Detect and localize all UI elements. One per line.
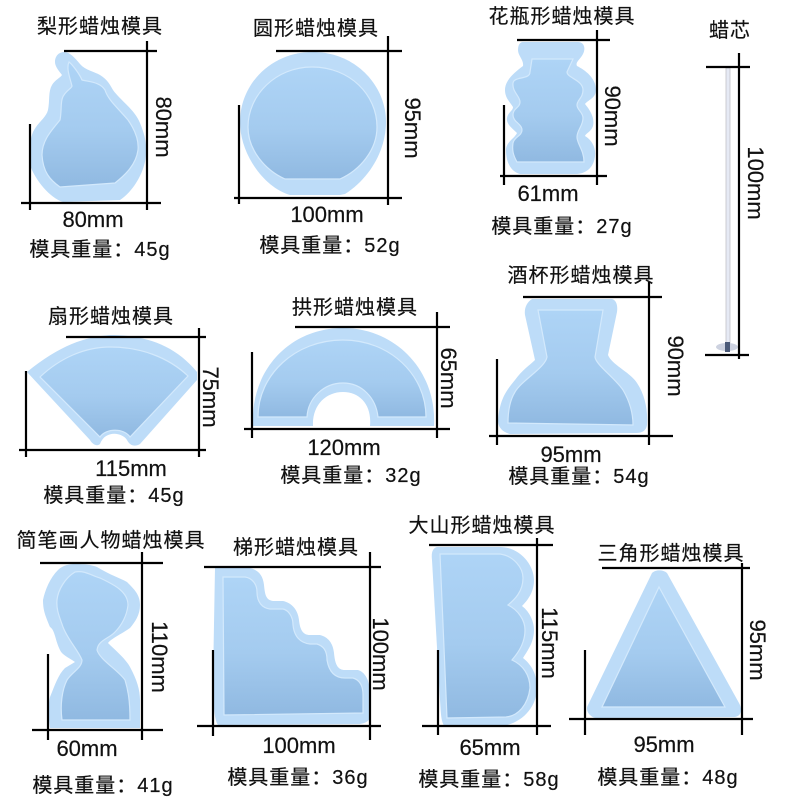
panel: pear mold	[21, 15, 176, 261]
title: 圆形蜡烛模具	[253, 17, 379, 40]
weight: 模具重量：58g	[418, 768, 560, 791]
height label: 80mm	[151, 96, 176, 158]
dimension lines	[197, 552, 381, 740]
width label: 80mm	[62, 207, 124, 232]
panel: mountain mold	[408, 514, 562, 791]
width label: 120mm	[307, 435, 381, 460]
dimension lines	[234, 36, 402, 205]
weight: 模具重量：32g	[280, 464, 422, 487]
height label: 90mm	[600, 85, 625, 147]
width label: 60mm	[56, 736, 118, 761]
title: 梯形蜡烛模具	[233, 536, 359, 559]
height label: 90mm	[663, 335, 688, 397]
width label: 95mm	[540, 442, 602, 467]
title: 大山形蜡烛模具	[408, 514, 556, 537]
weight: 模具重量：52g	[259, 234, 401, 257]
dimension lines	[19, 328, 206, 457]
height label: 110mm	[147, 621, 172, 693]
title: 三角形蜡烛模具	[598, 542, 744, 565]
wick	[716, 68, 738, 352]
title: 酒杯形蜡烛模具	[508, 264, 654, 287]
panel: fan mold	[19, 305, 223, 507]
dimension lines	[32, 552, 163, 740]
height label: 95mm	[745, 619, 770, 681]
panel: goblet mold	[489, 264, 688, 488]
panel: arch mold	[244, 296, 461, 487]
weight: 模具重量：45g	[43, 484, 185, 507]
dimension lines	[422, 538, 553, 735]
panel: triangle mold	[569, 542, 770, 789]
panel: figure mold	[16, 529, 206, 797]
weight: 模具重量：54g	[508, 465, 650, 488]
weight: 模具重量：41g	[32, 774, 174, 797]
mold shape	[505, 42, 596, 174]
panel: wick	[705, 19, 768, 359]
dimension lines	[705, 53, 750, 359]
height label: 100mm	[368, 617, 393, 691]
mold shape	[213, 568, 370, 725]
height label: 100mm	[743, 146, 768, 220]
title: 梨形蜡烛模具	[37, 15, 163, 38]
mold shape	[27, 335, 197, 446]
mold shape	[29, 52, 146, 202]
title: 花瓶形蜡烛模具	[488, 5, 636, 28]
height label: 65mm	[436, 347, 461, 409]
panel: round mold	[234, 17, 425, 257]
weight: 模具重量：27g	[491, 215, 633, 238]
dimension lines	[244, 312, 450, 438]
dimension lines	[500, 30, 610, 185]
panel: vase mold	[488, 5, 636, 238]
mold shape	[240, 52, 386, 195]
title: 简笔画人物蜡烛模具	[16, 529, 206, 552]
height label: 115mm	[537, 607, 562, 679]
mold shape	[253, 328, 434, 426]
width label: 95mm	[633, 732, 695, 757]
height label: 75mm	[198, 366, 223, 428]
panel: stairs mold	[197, 536, 393, 789]
width label: 100mm	[290, 202, 364, 227]
width label: 61mm	[517, 181, 579, 206]
dimension lines	[489, 282, 673, 445]
title: 蜡芯	[709, 19, 751, 42]
mold shape	[432, 547, 537, 727]
width label: 115mm	[95, 456, 167, 481]
mold shape	[498, 299, 647, 434]
dimension lines	[21, 41, 161, 210]
title: 扇形蜡烛模具	[48, 305, 174, 328]
height label: 95mm	[400, 97, 425, 159]
weight: 模具重量：36g	[227, 766, 369, 789]
weight: 模具重量：48g	[597, 766, 739, 789]
mold shape	[43, 564, 140, 728]
width label: 100mm	[262, 733, 336, 758]
dimension lines	[569, 563, 753, 735]
width label: 65mm	[459, 735, 521, 760]
title: 拱形蜡烛模具	[292, 296, 418, 319]
weight: 模具重量：45g	[29, 238, 171, 261]
mold shape	[587, 570, 741, 718]
